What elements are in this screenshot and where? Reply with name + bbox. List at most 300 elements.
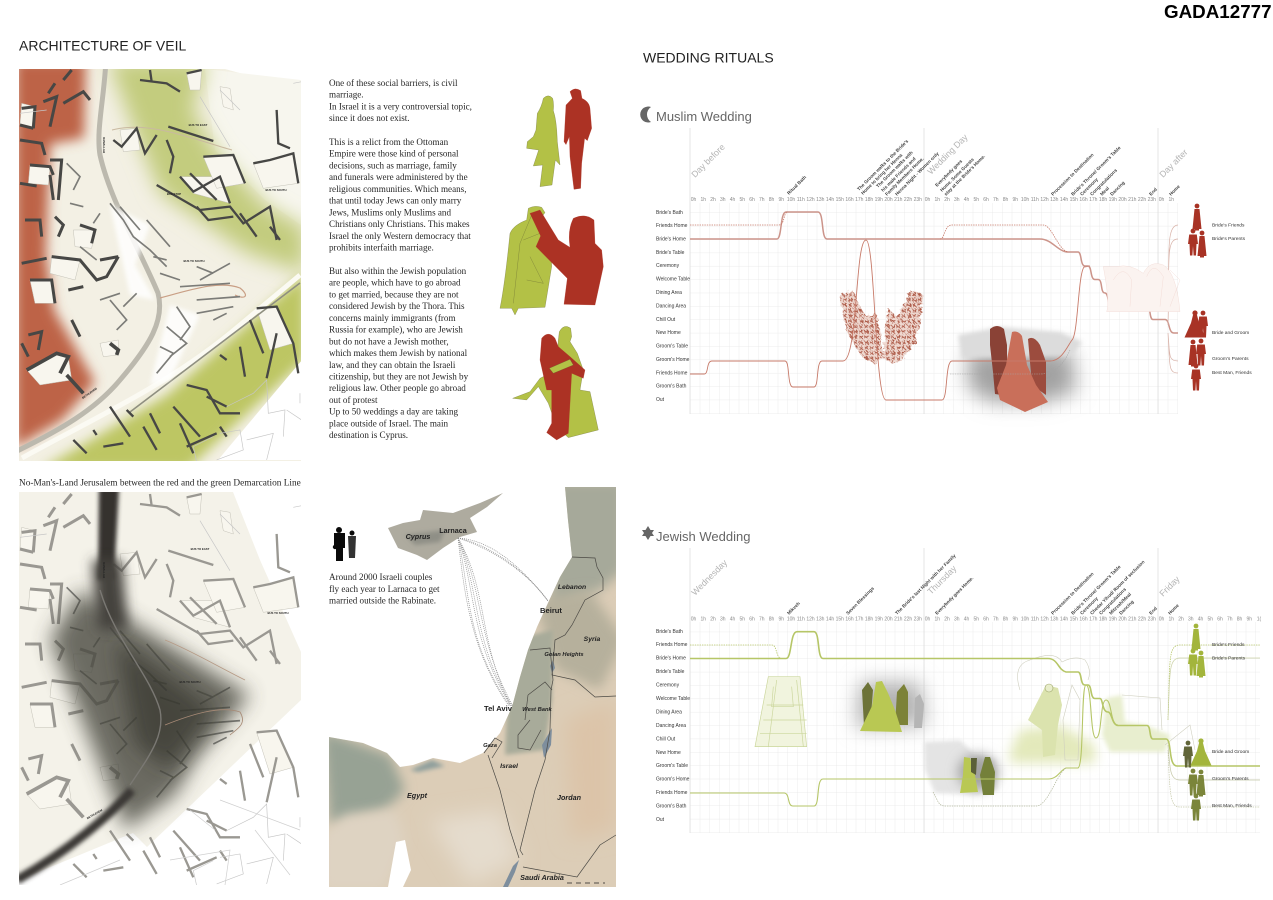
hour axis: 13h bbox=[816, 197, 825, 203]
text block: civil marriage essay: but do not have a Jewish mother, bbox=[329, 336, 449, 346]
hour axis: 20h bbox=[1118, 197, 1127, 203]
bride's parents bbox=[1188, 229, 1246, 258]
hour axis: 10h bbox=[787, 197, 795, 203]
location row labels: Bride's Table bbox=[656, 250, 685, 256]
water bodies bbox=[503, 660, 555, 887]
text block: civil marriage essay: Christians only Christians. This makes bbox=[329, 219, 470, 229]
bride and groom: Bride and Groom bbox=[1212, 330, 1249, 336]
panel: no-man's-land site map with dark shadow bbox=[17, 488, 302, 886]
white corner bbox=[218, 360, 305, 460]
text block: civil marriage essay: concerns mainly immigrants (from bbox=[329, 313, 456, 323]
event annotations: Family Members Home. bbox=[884, 156, 925, 197]
scale bar bbox=[567, 882, 605, 884]
event annotations: Congratulations bbox=[1089, 167, 1118, 197]
hour axis: 5h bbox=[739, 616, 745, 622]
title: architecture of veil: ARCHITECTURE OF VEIL bbox=[19, 38, 186, 54]
hour axis: 0h bbox=[1159, 616, 1164, 622]
hour axis: 11h bbox=[797, 197, 805, 203]
bride's friends: Bride's Friends bbox=[1212, 222, 1245, 228]
route lines bbox=[690, 212, 1178, 400]
hour axis: 4h bbox=[1198, 616, 1203, 622]
hour axis: 8h bbox=[1003, 197, 1008, 203]
groom's friends path bbox=[950, 350, 1070, 374]
hour axis: 15h bbox=[836, 616, 844, 622]
hour axis: 8h bbox=[1003, 616, 1008, 622]
event annotations: Procession to Destination bbox=[1050, 571, 1095, 616]
hour axis: 7h bbox=[993, 197, 999, 203]
hour axis: 8h bbox=[1237, 616, 1242, 622]
text block: civil marriage essay: Empire were those kind of personal bbox=[329, 149, 459, 159]
location row labels: Ceremony bbox=[656, 263, 680, 269]
place names: Israel bbox=[500, 763, 518, 770]
place names: Golan Heights bbox=[544, 652, 584, 658]
borders bbox=[484, 557, 616, 877]
hour axis: 22h bbox=[1138, 616, 1146, 622]
image: pale wedding guests bbox=[1103, 264, 1180, 312]
hour axis: 0h bbox=[691, 616, 696, 622]
location row labels: Groom's Bath bbox=[656, 804, 687, 810]
day labels: Wedding Day bbox=[925, 132, 970, 176]
bride's friends path bbox=[690, 645, 781, 658]
image: pale couple under tree bbox=[1010, 655, 1195, 763]
hour axis: 9h bbox=[1012, 197, 1018, 203]
hour axis: 1h bbox=[934, 197, 940, 203]
hour axis: 14h bbox=[826, 616, 834, 622]
couple silhouette icon bbox=[333, 527, 356, 561]
caption: no-man's-land: No-Man's-Land Jerusalem between the red and the green Demarcation Line bbox=[19, 478, 301, 488]
icon: star of david bbox=[642, 526, 654, 540]
text block: civil marriage essay: Russia for example), who are Jewish bbox=[329, 325, 463, 335]
place names: Lebanon bbox=[558, 584, 586, 591]
hour axis: 23h bbox=[914, 616, 922, 622]
text block: civil marriage essay: decisions, such as marriage, family bbox=[329, 160, 457, 170]
hour axis: 11h bbox=[1031, 616, 1039, 622]
hour axis: 3h bbox=[720, 197, 726, 203]
project code: GADA12777 bbox=[1164, 1, 1272, 22]
location row labels: Welcome Table bbox=[656, 696, 690, 702]
location row labels: New Home bbox=[656, 750, 681, 756]
event annotations: The Groom walks with bbox=[875, 150, 914, 189]
illustrations: couples in green and red bbox=[500, 89, 603, 440]
hour axis: 6h bbox=[749, 197, 755, 203]
grid bbox=[690, 128, 1178, 414]
location row labels: Dancing Area bbox=[656, 304, 686, 310]
day labels: Day before bbox=[689, 142, 727, 179]
hour axis: 17h bbox=[855, 616, 864, 622]
event annotations: Procession to Destination bbox=[1050, 152, 1095, 197]
bride's parents: Bride's Parents bbox=[1212, 656, 1246, 662]
location row labels: Groom's Table bbox=[656, 344, 688, 350]
bride's friends: Bride's Friends bbox=[1212, 642, 1245, 648]
text block: civil marriage essay: religious law. Other people go abroad bbox=[329, 383, 466, 393]
red zone bbox=[15, 60, 95, 448]
hour axis: 21h bbox=[1128, 616, 1137, 622]
hour axis: 21h bbox=[894, 197, 903, 203]
text block: civil marriage essay: One of these social barriers, is civil bbox=[329, 78, 458, 88]
bride's home path bbox=[690, 632, 1260, 766]
hour axis: 7h bbox=[759, 616, 765, 622]
event annotations: Meal bbox=[1099, 186, 1110, 197]
bus stop labels bbox=[81, 123, 287, 400]
hour axis: 1h bbox=[700, 197, 706, 203]
text block: civil marriage essay: But also within the Jewish population bbox=[329, 266, 467, 276]
day labels bbox=[689, 557, 1182, 598]
hour axis: 1h bbox=[700, 616, 706, 622]
chart: muslim wedding timeline bbox=[640, 106, 1252, 414]
departures home bbox=[1168, 225, 1178, 373]
map labels: BUS TO EAST bbox=[191, 547, 210, 551]
hour axis: 3h bbox=[720, 616, 726, 622]
event annotations: End bbox=[1148, 187, 1158, 197]
hour axis: 20h bbox=[884, 197, 893, 203]
hour axis: 16h bbox=[1079, 197, 1088, 203]
hour axis: 8h bbox=[769, 197, 774, 203]
day labels: Friday bbox=[1157, 574, 1182, 598]
text block: civil marriage essay: religious communities. Which means, bbox=[329, 184, 466, 194]
text block: civil marriage essay: to get married, because they are not bbox=[329, 289, 459, 299]
hour axis: 20h bbox=[1118, 616, 1127, 622]
event annotations: Bride's Throne/ Groom's Table bbox=[1070, 564, 1122, 616]
event annotations: Home to bring her Henna bbox=[860, 152, 904, 196]
map caption: fly each year to Larnaca to get bbox=[329, 584, 440, 594]
hour axis: 5h bbox=[973, 197, 979, 203]
groom's parents: Groom's Parents bbox=[1212, 356, 1249, 362]
grid bbox=[690, 548, 1260, 833]
bride and groom bbox=[1183, 738, 1249, 768]
hour axis: 14h bbox=[826, 197, 834, 203]
text block: civil marriage essay: Up to 50 weddings a day are taking bbox=[329, 407, 459, 417]
neighbouring outlines bbox=[20, 82, 302, 462]
text block: civil marriage essay: law, and they can obtain the Israeli bbox=[329, 360, 456, 370]
place names: Beirut bbox=[540, 606, 562, 615]
bus stop labels: BUS TO SOUTH bbox=[183, 259, 205, 263]
hour axis: 5h bbox=[739, 197, 745, 203]
location row labels: Bride's Table bbox=[656, 669, 685, 675]
map labels: BUS TO SOUTH bbox=[179, 680, 201, 684]
building shadows bbox=[20, 70, 298, 453]
day labels: Thursday bbox=[925, 563, 959, 596]
hour axis: 21h bbox=[1128, 197, 1137, 203]
location row labels: Friends Home bbox=[656, 642, 688, 648]
location row labels: Dining Area bbox=[656, 290, 682, 296]
departures home bbox=[1168, 645, 1260, 720]
event annotations: Seven Blessings bbox=[845, 586, 875, 616]
event annotations: Home. Some Guests bbox=[939, 157, 975, 193]
hour axis: 12h bbox=[1040, 616, 1049, 622]
hour axis: 0h bbox=[691, 197, 696, 203]
day labels: Wednesday bbox=[689, 557, 730, 597]
hour axis: 1( bbox=[1257, 616, 1262, 622]
footprints bbox=[20, 494, 298, 809]
chart: jewish wedding timeline bbox=[642, 526, 1262, 833]
hour axis: 7h bbox=[1227, 616, 1233, 622]
text block: civil marriage essay: since it does not exist. bbox=[329, 113, 410, 123]
image: bride with attendants photo bbox=[856, 681, 926, 732]
hour axis: 5h bbox=[1207, 616, 1213, 622]
groom's home path bbox=[690, 240, 1090, 400]
hour axis: 10h bbox=[1021, 616, 1029, 622]
hour axis: 6h bbox=[983, 616, 989, 622]
hour axis: 19h bbox=[875, 197, 883, 203]
bride's friends bbox=[1192, 624, 1245, 650]
text block: civil marriage essay: citizenship, but they are not Jewish by bbox=[329, 372, 469, 382]
event annotations: Henna Night - Women only bbox=[894, 151, 940, 197]
hour axis: 18h bbox=[1099, 197, 1107, 203]
event annotations: his male Friends and bbox=[880, 156, 917, 193]
event annotations: Mikveh bbox=[786, 601, 801, 616]
location row labels: Bride's Bath bbox=[656, 210, 683, 216]
hour axis: 3h bbox=[954, 197, 960, 203]
best man, friends: Best Man, Friends bbox=[1212, 370, 1252, 376]
event annotations: Ritual Bath bbox=[786, 175, 807, 196]
place names: Larnaca bbox=[439, 526, 468, 535]
best man, friends bbox=[1191, 794, 1252, 820]
location row labels: Welcome Table bbox=[656, 276, 690, 282]
location row labels: Dancing Area bbox=[656, 723, 686, 729]
shadow field bbox=[50, 590, 250, 830]
event annotations: Mitzvah/Meal bbox=[1108, 592, 1132, 616]
location row labels: Groom's Home bbox=[656, 357, 690, 363]
location row labels: Bride's Home bbox=[656, 656, 686, 662]
hour axis: 9h bbox=[778, 616, 784, 622]
heading: muslim wedding: Muslim Wedding bbox=[656, 109, 752, 124]
event annotations: Dancing bbox=[1109, 180, 1126, 197]
event annotations: End bbox=[1148, 606, 1158, 616]
event annotations bbox=[786, 553, 1180, 616]
hour axis: 18h bbox=[865, 197, 873, 203]
map caption bbox=[329, 574, 440, 604]
location row labels: Groom's Table bbox=[656, 763, 688, 769]
text block: civil marriage essay: Jews, Muslims only Muslims and bbox=[329, 207, 451, 217]
hour axis: 12h bbox=[806, 197, 815, 203]
land base bbox=[322, 480, 625, 890]
cyprus bbox=[388, 493, 503, 560]
hour axis: 7h bbox=[993, 616, 999, 622]
text block: civil marriage essay: In Israel it is a very controversial topic, bbox=[329, 101, 472, 111]
green zone north bbox=[108, 60, 305, 273]
place names: Gaza bbox=[483, 743, 498, 749]
hour axis: 17h bbox=[855, 197, 864, 203]
bus stop labels: BUS STOP bbox=[167, 192, 181, 196]
map caption: married outside the Rabinate. bbox=[329, 596, 436, 606]
place names: Jordan bbox=[557, 793, 582, 802]
map labels: BUS TO SOUTH bbox=[267, 611, 289, 615]
legend: muslim wedding figures bbox=[1184, 204, 1252, 390]
hour axis: 15h bbox=[1070, 616, 1078, 622]
location row labels: Groom's Bath bbox=[656, 384, 687, 390]
place names bbox=[406, 526, 601, 882]
hour axis: 9h bbox=[1246, 616, 1252, 622]
image: veil and couple photo bbox=[924, 740, 998, 795]
hour axis: 19h bbox=[875, 616, 883, 622]
bride's friends bbox=[1192, 204, 1245, 230]
location row labels: Groom's Home bbox=[656, 776, 690, 782]
text block: civil marriage essay: that until today Jews can only marry bbox=[329, 196, 462, 206]
text block: civil marriage essay: considered Jewish by the Thora. This bbox=[329, 301, 465, 311]
map labels: RAMALLAH bbox=[102, 562, 106, 578]
best man, friends bbox=[1191, 364, 1252, 390]
hour axis: 7h bbox=[759, 197, 765, 203]
hour axis: 13h bbox=[1050, 616, 1059, 622]
map labels bbox=[86, 547, 289, 820]
hour axis: 13h bbox=[1050, 197, 1059, 203]
hour axis: 16h bbox=[845, 616, 854, 622]
location row labels: Chill Out bbox=[656, 736, 676, 742]
hour axis: 19h bbox=[1109, 616, 1117, 622]
hour axis: 2h bbox=[1178, 616, 1184, 622]
location row labels: Ceremony bbox=[656, 682, 680, 688]
hour axis: 2h bbox=[710, 616, 716, 622]
event annotations bbox=[786, 138, 1181, 197]
bus stop labels: RAMALLAH bbox=[102, 137, 106, 153]
hour axis: 15h bbox=[836, 197, 844, 203]
text block: civil marriage essay: Israel the only Western democracy that bbox=[329, 231, 471, 241]
text block: civil marriage essay: prohibits interfaith marriage. bbox=[329, 242, 434, 252]
hour axis: 16h bbox=[1079, 616, 1088, 622]
hour axis: 1h bbox=[1168, 197, 1174, 203]
hour axis: 22h bbox=[904, 197, 912, 203]
hour axis: 2h bbox=[944, 616, 950, 622]
road bbox=[15, 60, 160, 452]
bus stop labels: BUS TO EAST bbox=[189, 123, 208, 127]
couple walking bbox=[527, 89, 592, 189]
hour axis: 2h bbox=[710, 197, 716, 203]
event annotations: Ceremony bbox=[1079, 596, 1099, 616]
hour axis: 22h bbox=[904, 616, 912, 622]
groom's parents bbox=[1188, 769, 1249, 796]
location row labels: New Home bbox=[656, 330, 681, 336]
hour axis: 0h bbox=[925, 197, 930, 203]
location row labels: Friends Home bbox=[656, 223, 688, 229]
hour axis: 14h bbox=[1060, 197, 1068, 203]
text block: civil marriage essay: and funerals were administered by the bbox=[329, 172, 468, 182]
hour axis: 20h bbox=[884, 616, 893, 622]
event annotations: Bride's Throne/ Groom's Table bbox=[1070, 145, 1122, 197]
hour axis: 18h bbox=[865, 616, 873, 622]
bride's parents: Bride's Parents bbox=[1212, 236, 1246, 242]
event annotations: The Bride's last Night with her Family bbox=[894, 553, 957, 616]
panel: site map with red and green demarcation zones bbox=[15, 60, 305, 470]
map labels: BETHLEHEM bbox=[86, 808, 104, 820]
event annotations: Home bbox=[1167, 603, 1180, 616]
place names: Cyprus bbox=[406, 532, 430, 541]
event annotations: The Groom walks to the Bride's bbox=[856, 138, 910, 192]
green zone south bbox=[40, 273, 305, 470]
hour axis: 6h bbox=[983, 197, 989, 203]
building footprints bbox=[20, 70, 298, 385]
hour axis: 19h bbox=[1109, 197, 1117, 203]
terrain ridges bbox=[110, 205, 200, 385]
groom's parents bbox=[1188, 339, 1249, 366]
hour axis: 14h bbox=[1060, 616, 1068, 622]
hour axis: 9h bbox=[778, 197, 784, 203]
hour axis: 17h bbox=[1089, 197, 1098, 203]
day labels bbox=[689, 132, 1190, 179]
location row labels: Bride's Bath bbox=[656, 629, 683, 635]
event annotations: Ceremony bbox=[1079, 177, 1099, 197]
location row labels: Friends Home bbox=[656, 790, 688, 796]
place names: Saudi Arabia bbox=[520, 873, 564, 882]
hour axis: 23h bbox=[914, 197, 922, 203]
text block: civil marriage essay: which makes them Jewish by national bbox=[329, 348, 468, 358]
text block: civil marriage essay: marriage. bbox=[329, 90, 364, 100]
event annotations: Everybody goes bbox=[934, 158, 964, 188]
hour axis: 6h bbox=[1217, 616, 1223, 622]
hour axis: 0h bbox=[925, 616, 930, 622]
title: wedding rituals: WEDDING RITUALS bbox=[643, 50, 774, 66]
hour axis: 22h bbox=[1138, 197, 1146, 203]
hour axis: 17h bbox=[1089, 616, 1098, 622]
hour axis: 9h bbox=[1012, 616, 1018, 622]
hour axis: 13h bbox=[816, 616, 825, 622]
buildings bbox=[20, 494, 298, 877]
legend: jewish wedding figures bbox=[1183, 624, 1252, 820]
bride's home path bbox=[690, 212, 1178, 333]
hour axis: 4h bbox=[964, 197, 969, 203]
event annotations: stay at the Bride's Home. bbox=[943, 154, 986, 197]
text block: civil marriage essay: This is a relict from the Ottoman bbox=[329, 137, 449, 147]
hour axis: 6h bbox=[749, 616, 755, 622]
green lowlands bbox=[549, 487, 616, 601]
image: muslim wedding photo bbox=[958, 326, 1082, 412]
hour axis: 1h bbox=[934, 616, 940, 622]
hour axis: 23h bbox=[1148, 197, 1156, 203]
bus stop labels: BETHLEHEM bbox=[81, 386, 98, 400]
location row labels: Out bbox=[656, 397, 665, 403]
bride and groom: Bride and Groom bbox=[1212, 749, 1249, 755]
hour axis: 10h bbox=[1021, 197, 1029, 203]
heading: jewish wedding: Jewish Wedding bbox=[656, 529, 750, 544]
hour axis: 11h bbox=[797, 616, 805, 622]
hour axis: 10h bbox=[787, 616, 795, 622]
text block: civil marriage essay: destination is Cyprus. bbox=[329, 430, 408, 440]
lifting the veil bbox=[500, 206, 603, 315]
gulf of suez bbox=[388, 840, 411, 887]
event annotations: Chedar Yihud/ Room of seclusion bbox=[1089, 559, 1146, 616]
hour axis: 12h bbox=[1040, 197, 1049, 203]
location row labels: Dining Area bbox=[656, 710, 682, 716]
map caption: Around 2000 Israeli couples bbox=[329, 572, 433, 582]
bride and groom bbox=[1184, 310, 1249, 338]
panel: regional map cyprus to israel bbox=[322, 480, 625, 890]
location row labels: Out bbox=[656, 817, 665, 823]
place names: Syria bbox=[584, 636, 601, 643]
event annotations: Everybody goes Home. bbox=[934, 576, 974, 616]
location row labels: Chill Out bbox=[656, 317, 676, 323]
hour axis: 12h bbox=[806, 616, 815, 622]
image: pale chuppah stairs bbox=[755, 677, 807, 747]
outlines bbox=[20, 506, 302, 886]
hour axis: 4h bbox=[730, 616, 735, 622]
icon: crescent moon bbox=[640, 106, 651, 122]
route lines bbox=[690, 632, 1260, 807]
hour axis: 3h bbox=[1188, 616, 1194, 622]
day labels: Day after bbox=[1157, 147, 1190, 179]
bride's friends path bbox=[690, 212, 1068, 252]
hour axis: 11h bbox=[1031, 197, 1039, 203]
location row labels bbox=[656, 210, 690, 403]
hour axis: 0h bbox=[1159, 197, 1164, 203]
hour axis: 5h bbox=[973, 616, 979, 622]
location row labels bbox=[656, 629, 690, 823]
groom's friends path bbox=[933, 768, 1066, 806]
bus stop labels: BUS TO SOUTH bbox=[265, 188, 287, 192]
hour axis: 1h bbox=[1168, 616, 1174, 622]
text block: civil marriage essay: place outside of Israel. The main bbox=[329, 418, 448, 428]
hour axis: 15h bbox=[1070, 197, 1078, 203]
hour axis: 3h bbox=[954, 616, 960, 622]
place names: West Bank bbox=[522, 707, 553, 713]
